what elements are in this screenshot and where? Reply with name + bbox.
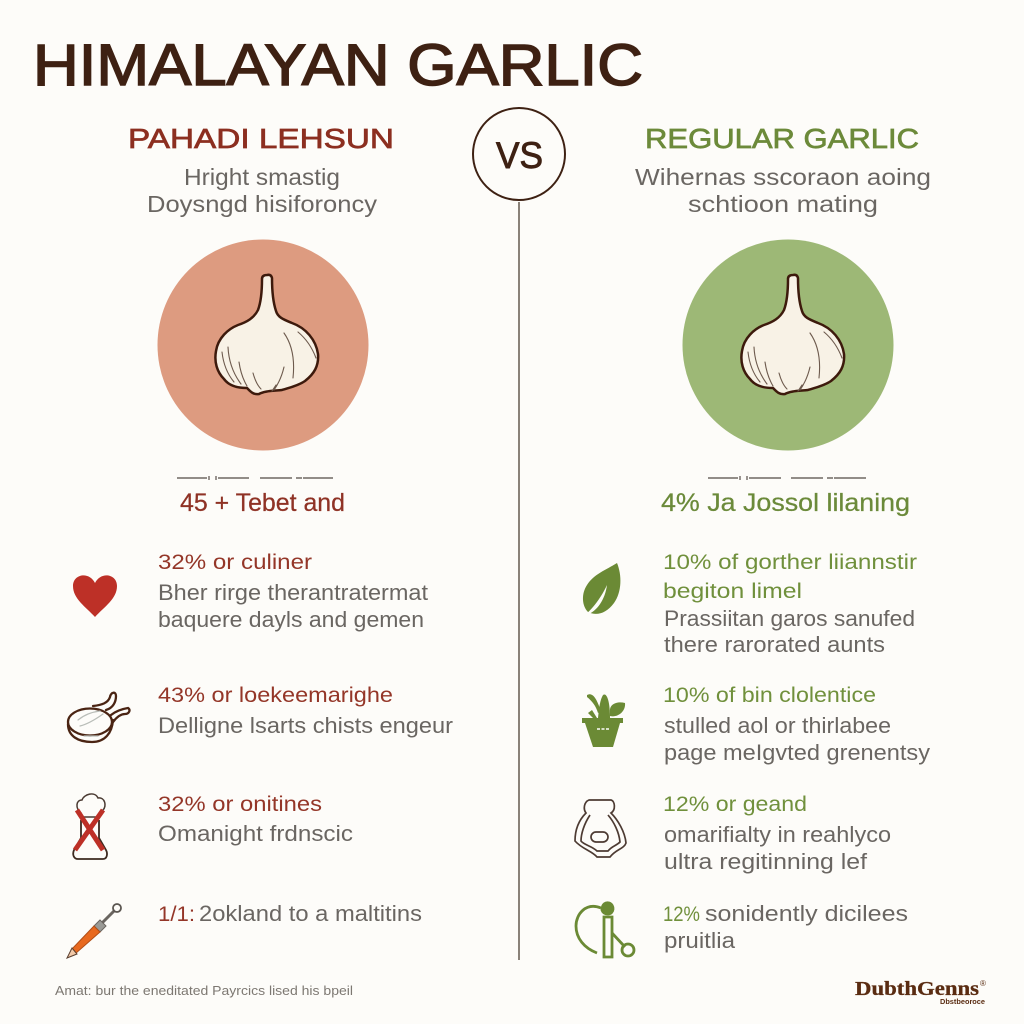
right row 2 [582, 683, 930, 765]
left row 1: baquere dayls and gemen [158, 607, 424, 632]
brand logo [855, 978, 986, 1006]
right heading: REGULAR GARLIC [645, 123, 919, 154]
left row 2: 43% or loekeemarighe [158, 683, 393, 707]
right row 4: pruitlia [664, 928, 736, 953]
left row 4: 2okland to a maltitins [199, 901, 422, 926]
left row 1 [73, 550, 428, 632]
right row 1: 10% of gorther liiannstir [663, 550, 917, 574]
left decorative rule [177, 476, 333, 480]
left row 2: Delligne lsarts chists engeur [158, 713, 453, 738]
icon: heart [73, 575, 117, 617]
right row 1 [582, 550, 917, 657]
brand logo: Dbstbeoroce [940, 999, 985, 1006]
right row 1: there rarorated aunts [664, 632, 885, 657]
left row 2 [68, 683, 453, 742]
right row 2: 10% of bin clolentice [663, 683, 876, 707]
left row 4: 1/1: [158, 902, 195, 926]
right row 3 [575, 792, 891, 874]
right decorative rule [708, 476, 866, 480]
left row 1: Bher rirge therantratermat [158, 580, 428, 605]
right row 1: Prassiitan garos sanufed [664, 606, 915, 631]
center divider [518, 202, 520, 960]
left row 3: 32% or onitines [158, 792, 322, 816]
footer note: Amat: bur the eneditated Payrcics lised his bpeil [55, 983, 353, 998]
icon: potted plant [582, 694, 625, 747]
right row 4 [576, 901, 908, 957]
panel: left column [67, 123, 453, 958]
panel: right column [575, 123, 931, 957]
right subtitle [635, 164, 931, 217]
left row 1: 32% or culiner [158, 550, 312, 574]
right row 3: ultra regitinning lef [664, 849, 868, 874]
icon: green tool [576, 903, 634, 957]
right row 1: begiton limel [663, 579, 802, 603]
left row 4 [67, 901, 422, 958]
left subtitle: Hright smastig [184, 164, 340, 190]
icon: leaf [582, 563, 620, 617]
left subtitle [147, 164, 377, 217]
right row 4: 12% [663, 902, 700, 926]
icon: jar [575, 800, 626, 857]
left heading: PAHADI LEHSUN [128, 123, 394, 154]
right row 2: stulled aol or thirlabee [664, 713, 891, 738]
left garlic illustration [158, 240, 368, 450]
brand logo: ® [980, 979, 986, 988]
right subtitle: schtioon mating [688, 191, 878, 217]
right row 2: page meIgvted grenentsy [664, 740, 930, 765]
title: HIMALAYAN GARLIC [33, 33, 643, 98]
icon: crossed chef hat [73, 794, 107, 859]
right garlic illustration [682, 240, 894, 450]
icon: orange pen [67, 904, 121, 958]
right row 3: omarifialty in reahlyco [664, 822, 891, 847]
right row 4: sonidently dicilees [705, 901, 908, 926]
icon: pan [68, 693, 129, 742]
brand logo: DubthGenns [855, 978, 979, 1000]
VS badge [473, 108, 565, 200]
left row 3 [73, 792, 353, 859]
left subtitle: Doysngd hisiforoncy [147, 191, 377, 217]
left row 3: Omanight frdnscic [158, 821, 353, 846]
right row 3: 12% or geand [663, 792, 807, 816]
left stat: 45 + Tebet and [180, 489, 345, 517]
right stat: 4% Ja Jossol lilaning [661, 489, 910, 517]
VS badge: VS [496, 135, 543, 176]
right subtitle: Wihernas sscoraon aoing [635, 164, 931, 190]
